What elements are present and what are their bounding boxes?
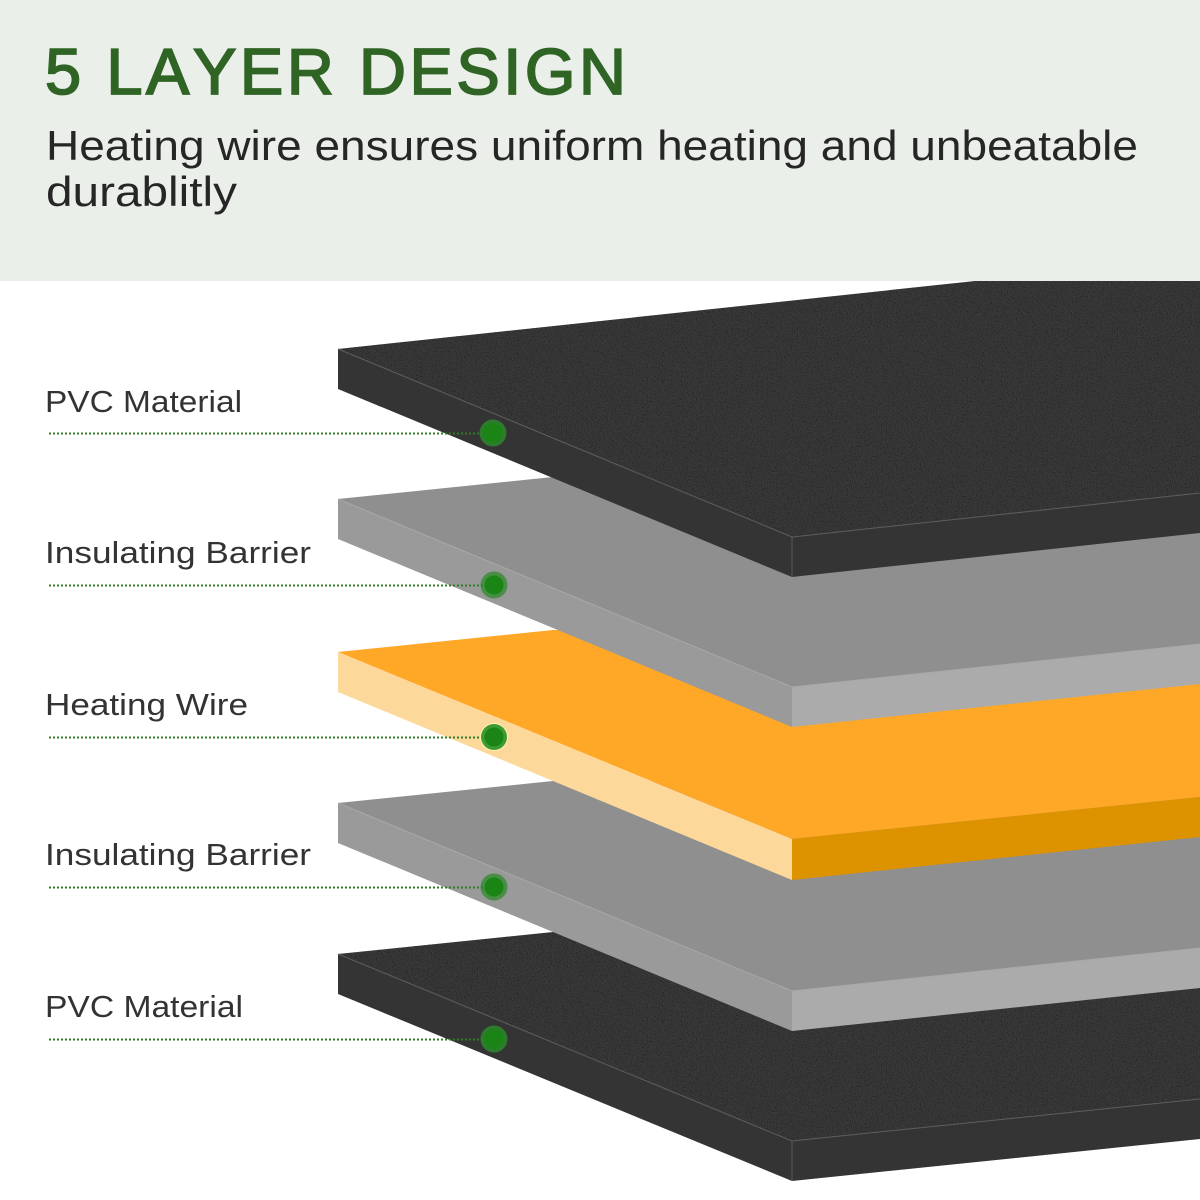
- callout: Insulating Barrier lower: Insulating Barrier: [45, 837, 311, 872]
- layer 3: heating wire: [338, 630, 1200, 880]
- layer 1: PVC material: [338, 281, 1200, 577]
- header panel: [0, 0, 1200, 281]
- callout: PVC Material bottom: [45, 989, 508, 1052]
- subtitle: [46, 122, 1138, 215]
- callout: PVC Material top: PVC Material: [45, 384, 242, 419]
- subtitle: Heating wire ensures uniform heating and unbeatable: [46, 122, 1138, 169]
- layer 4: insulating barrier: [338, 781, 1200, 1031]
- callout: PVC Material bottom: PVC Material: [45, 989, 243, 1024]
- callout: Heating Wire: [45, 687, 508, 751]
- subtitle: durablitly: [46, 168, 237, 215]
- callout: Insulating Barrier upper: Insulating Barrier: [45, 535, 311, 570]
- callout: Heating Wire: Heating Wire: [45, 687, 248, 722]
- layer 5: PVC material: [338, 932, 1200, 1181]
- callout: Insulating Barrier upper: [45, 535, 508, 598]
- callout: PVC Material top: [45, 384, 506, 446]
- callout: Insulating Barrier lower: [45, 837, 508, 900]
- title: 5 LAYER DESIGN: [45, 35, 626, 108]
- layer 2: insulating barrier: [338, 477, 1200, 727]
